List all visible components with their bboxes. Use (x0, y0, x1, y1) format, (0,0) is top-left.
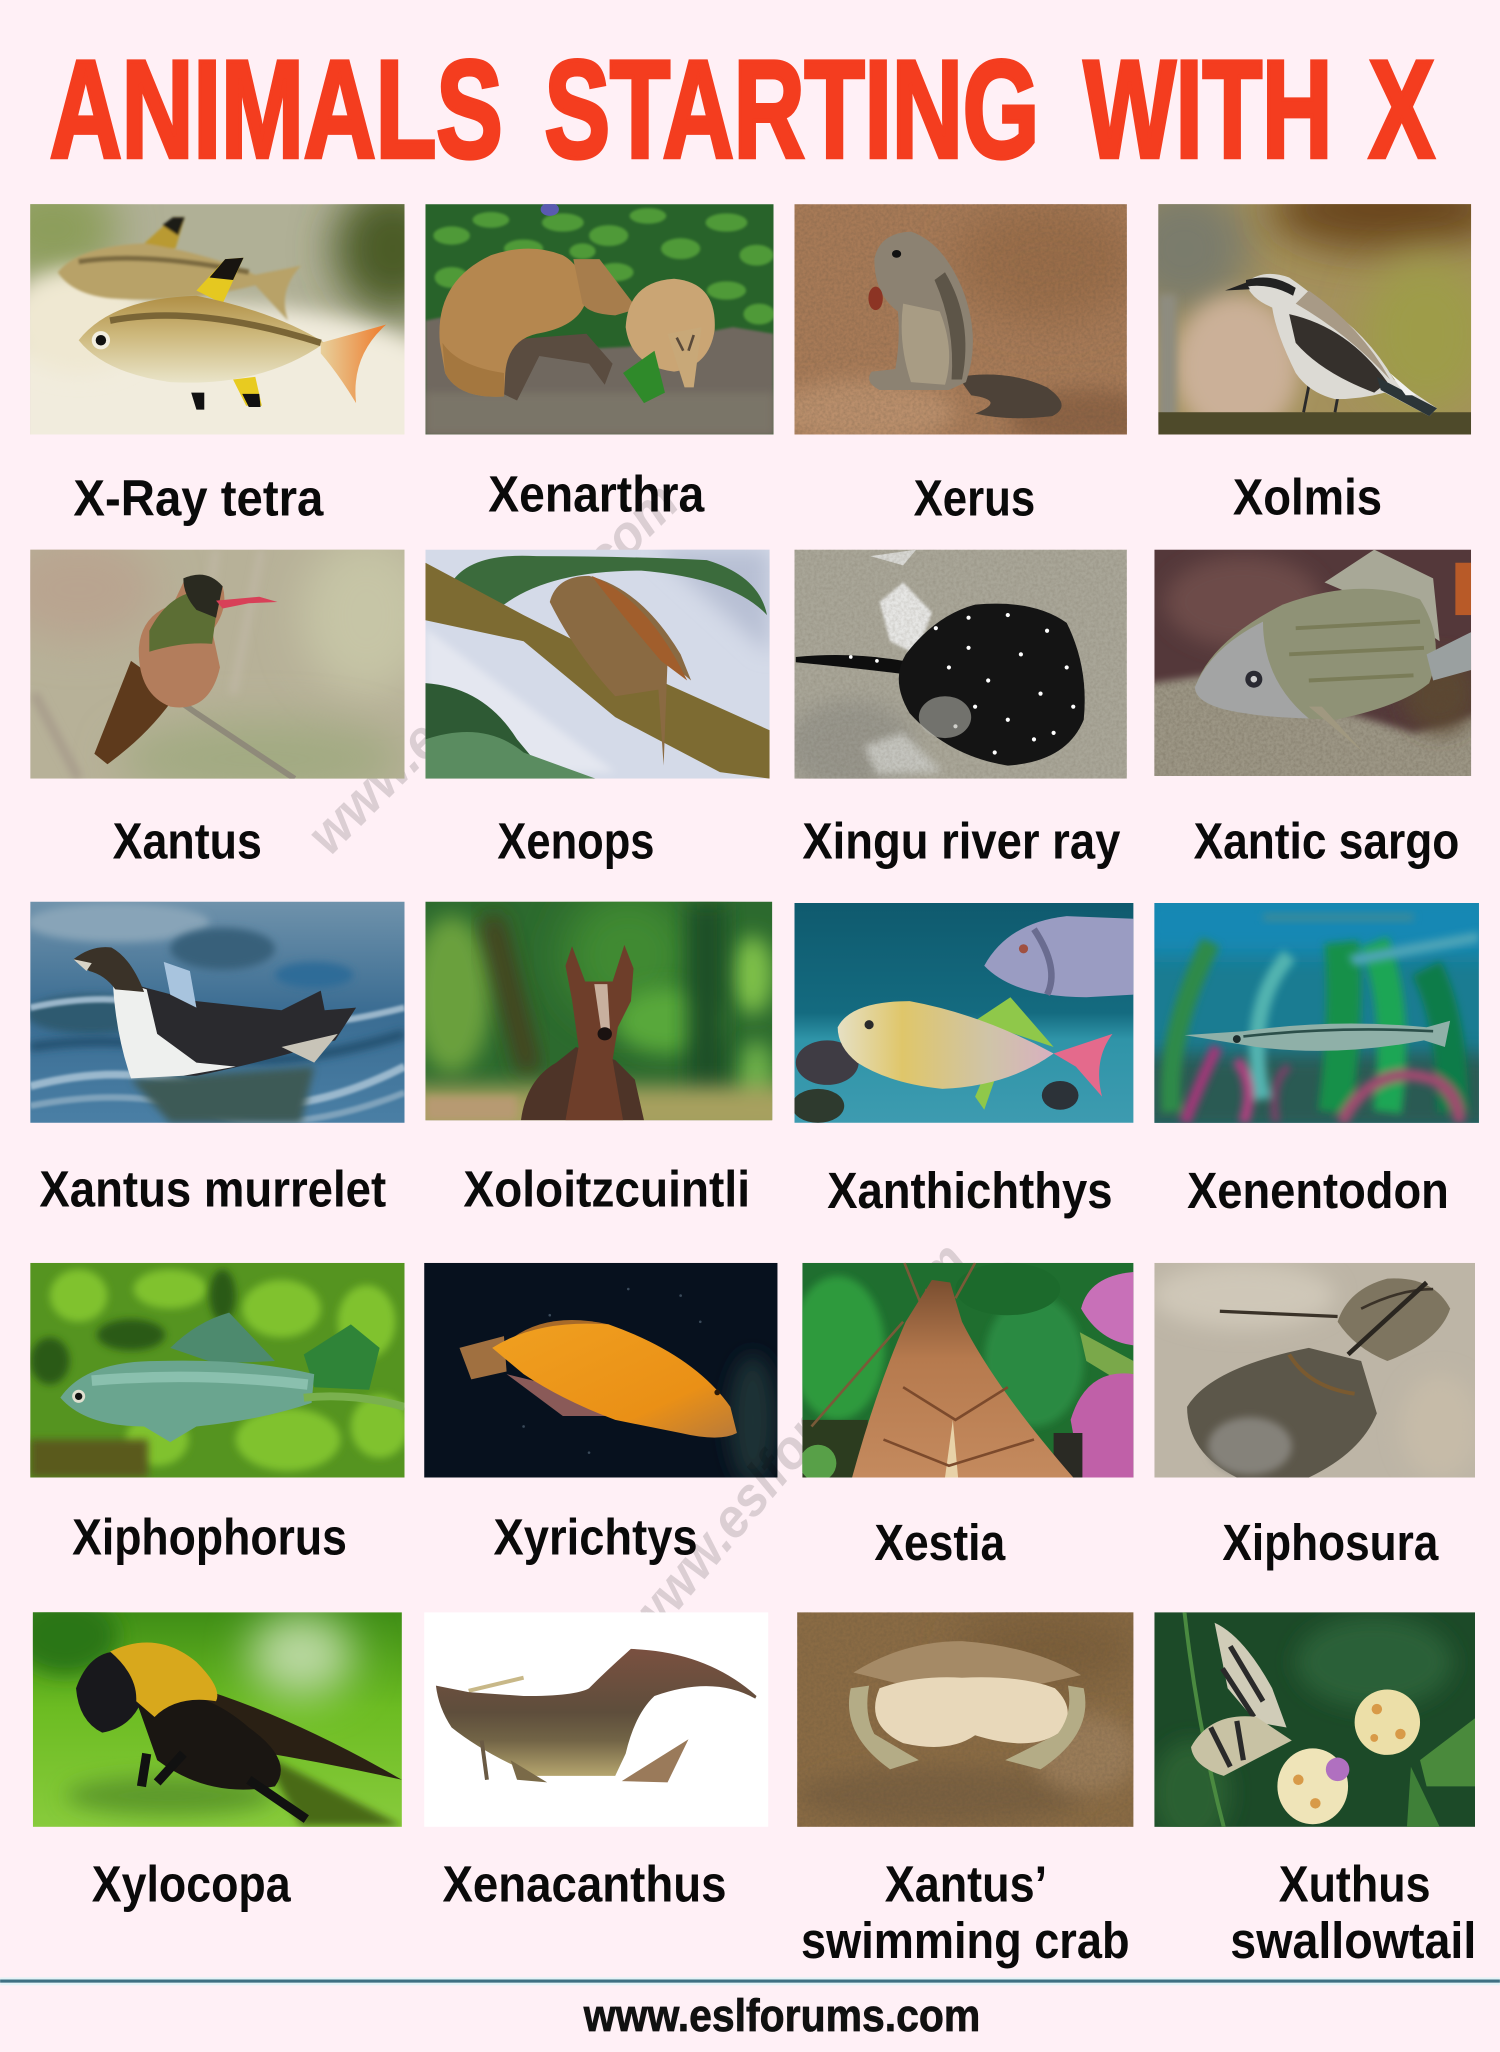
label: Xantus' swimming crab: swimming crab (801, 1912, 1130, 1969)
label: Xiphophorus: Xiphophorus (72, 1509, 347, 1566)
photo: Xantus' swimming crab (797, 1612, 1134, 1827)
title: ANIMALS (50, 32, 503, 187)
watermark: lower: www.eslforums.com (612, 1231, 979, 1651)
icon: bird (1225, 274, 1437, 416)
icon: hummingbird (94, 575, 278, 764)
label: Xerus: Xerus (914, 470, 1035, 527)
label: Xantus' swimming crab (801, 1856, 1130, 1969)
panel: Xanthichthys (792, 903, 1133, 1219)
panel: Xerus (772, 203, 1165, 527)
icon: stingray (796, 604, 1085, 766)
photo: Xenops (426, 550, 770, 779)
photo: Xuthus swallowtail (1154, 1612, 1475, 1827)
icon: front fish (79, 258, 386, 410)
panel: Xenarthra (425, 203, 775, 523)
panel: Xantus' swimming crab (797, 1610, 1139, 1969)
photo: Xenacanthus (424, 1612, 768, 1827)
icon: triggerfish (838, 997, 1113, 1110)
label: Xuthus swallowtail: swallowtail (1230, 1912, 1476, 1969)
icon: carpenter bee (76, 1643, 402, 1819)
icon: moth (812, 1263, 1073, 1477)
photo: Xiphosura (1154, 1262, 1475, 1478)
panel: Xenacanthus (424, 1612, 768, 1913)
icon: swordtail fish (60, 1313, 405, 1442)
panel: X-Ray tetra (0, 177, 465, 527)
title (50, 32, 1434, 187)
title: WITH (1084, 32, 1332, 187)
label: Xantus murrelet: Xantus murrelet (39, 1161, 386, 1218)
photo: Xestia (802, 1262, 1134, 1478)
photo: Xenentodon (1154, 903, 1479, 1123)
title: X (1369, 32, 1434, 187)
panel: Xantus (0, 537, 432, 869)
panel: Xolmis (1119, 168, 1500, 525)
panel: Xenentodon (1139, 890, 1495, 1219)
icon: swallowtail butterfly (1191, 1623, 1292, 1776)
label: Xoloitzcuintli: Xoloitzcuintli (463, 1161, 750, 1218)
label: Xenentodon: Xenentodon (1187, 1162, 1449, 1219)
label: Xolmis: Xolmis (1233, 468, 1382, 525)
panel: Xoloitzcuintli (393, 890, 812, 1218)
photo: Xyrichtys (424, 1262, 778, 1478)
panel: Xylocopa (13, 1597, 402, 1913)
icon: large horseshoe crab (1187, 1282, 1427, 1477)
label: Xanthichthys: Xanthichthys (827, 1162, 1113, 1219)
watermark: upper: www.eslforums.com (295, 470, 690, 866)
icon: murrelet bird (73, 947, 356, 1078)
footer website: www.eslforums.com (583, 1990, 980, 2041)
label: Xuthus swallowtail (1230, 1856, 1476, 1969)
panel: Xestia (791, 1263, 1133, 1571)
photo: Xylocopa (32, 1612, 402, 1827)
icon: back fish (58, 217, 301, 321)
icon: grey fish (984, 916, 1133, 997)
label: Xantic sargo: Xantic sargo (1194, 812, 1459, 869)
panel: Xyrichtys (424, 1263, 777, 1566)
label: Xylocopa: Xylocopa (92, 1856, 291, 1913)
label: Xenarthra: Xenarthra (488, 466, 705, 523)
branch (425, 563, 770, 779)
label: Xestia: Xestia (874, 1514, 1006, 1571)
icon: lantana flowers (1277, 1689, 1420, 1824)
photo: Xanthichthys (794, 903, 1134, 1123)
icon: hairless dog (521, 945, 644, 1120)
photo: X-Ray tetra (30, 204, 404, 434)
footer divider (0, 1977, 1500, 1985)
icon: crab (849, 1641, 1085, 1769)
label: Xantus: Xantus (113, 812, 262, 869)
panel: Xenops (425, 550, 770, 869)
panel: Xantus murrelet (26, 902, 405, 1218)
plant sprout (623, 351, 665, 403)
label: Xyrichtys: Xyrichtys (494, 1509, 698, 1566)
photo: Xantus (30, 550, 404, 779)
icon: orange wrasse (459, 1320, 737, 1438)
photo: Xolmis (1158, 204, 1472, 434)
photo: Xoloitzcuintli (425, 902, 772, 1120)
icon: needlefish (1184, 1021, 1450, 1051)
photo: Xiphophorus (30, 1262, 404, 1478)
label: Xantus' swimming crab: Xantus’ (885, 1856, 1047, 1913)
photo: Xerus (794, 204, 1127, 434)
icon: squirrel (868, 232, 1062, 418)
label: X-Ray tetra: X-Ray tetra (73, 470, 324, 527)
panel: Xiphosura (1152, 1263, 1479, 1571)
panel: Xuthus swallowtail (1152, 1612, 1476, 1969)
photo: Xenarthra (425, 204, 774, 434)
label: Xuthus swallowtail: Xuthus (1279, 1856, 1431, 1913)
panel: Xantic sargo (1126, 550, 1479, 869)
moss perch (1158, 412, 1471, 434)
photo: Xantus murrelet (30, 902, 404, 1123)
icon: large armadillo (439, 249, 637, 400)
upper leaf (452, 556, 767, 615)
icon: small armadillo (626, 279, 715, 387)
lower leaves (425, 683, 550, 779)
icon: sargo fish (1195, 550, 1471, 752)
panel: Xingu river ray (785, 550, 1127, 869)
photo: Xingu river ray (794, 550, 1127, 779)
label: Xenacanthus: Xenacanthus (442, 1856, 726, 1913)
perch twig (131, 667, 295, 779)
label: Xingu river ray: Xingu river ray (802, 812, 1121, 869)
panel: Xiphophorus (30, 1263, 408, 1566)
icon: xenops bird (550, 576, 691, 766)
photo: Xantic sargo (1154, 550, 1472, 776)
title: STARTING (545, 32, 1039, 187)
icon: xenacanthus fish (436, 1649, 757, 1782)
icon: small horseshoe crab (1220, 1278, 1450, 1361)
label: Xenops: Xenops (497, 812, 654, 869)
label: Xiphosura: Xiphosura (1222, 1514, 1439, 1571)
